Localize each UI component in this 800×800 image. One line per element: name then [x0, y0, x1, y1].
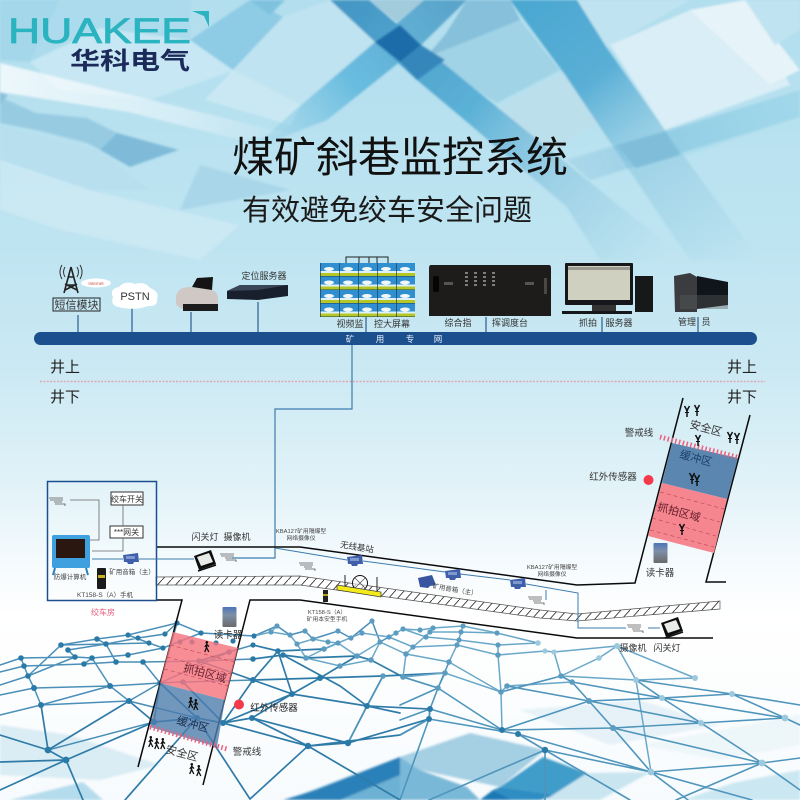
bus: mine private network: 网 — [434, 334, 442, 344]
walkers — [149, 641, 209, 776]
warning line — [660, 437, 737, 457]
zone labels lower: 抓拍区域 — [182, 661, 228, 685]
icon: SMS module tower: 短信模块 — [54, 298, 98, 312]
winch switch: 绞车开关 — [111, 494, 143, 504]
mine speaker — [109, 553, 155, 576]
lower camera and lamp: 摄像机 — [619, 642, 647, 653]
band A — [330, 0, 680, 260]
zone labels: 缓冲区 — [678, 447, 714, 469]
winch room camera — [49, 498, 65, 506]
KBA camera label left: KBA127矿用隔爆型 — [276, 527, 326, 535]
KBA camera label right: 网络摄像仪 — [538, 570, 567, 578]
icon: positioning server — [227, 270, 288, 300]
upper right zones — [648, 405, 740, 553]
warning line lower — [150, 727, 227, 749]
handset label: 矿用本安型手机 — [307, 615, 347, 623]
lower left zones — [149, 632, 238, 776]
tunnel walls — [138, 398, 750, 785]
dispatch console: 挥调度台 — [492, 317, 528, 328]
flash lamp and camera: upper left: 闪关灯 — [191, 531, 219, 542]
dispatch console: 综合指 — [444, 317, 472, 328]
base station 3 — [510, 578, 526, 589]
bus: mine private network: 用 — [376, 334, 384, 344]
workers — [680, 405, 740, 535]
gateway — [110, 526, 143, 538]
admin computer: 管理 — [678, 316, 696, 327]
base station 1 — [347, 555, 363, 566]
network link to underground — [232, 345, 352, 558]
handset label — [307, 609, 347, 623]
upper card reader — [646, 543, 675, 579]
dispatch console — [429, 265, 551, 328]
zone labels lower — [164, 661, 228, 764]
KBA camera label right: KBA127矿用隔爆型 — [527, 563, 577, 571]
zone labels lower: 缓冲区 — [175, 713, 211, 735]
icon: SMS module tower: Internet — [88, 281, 104, 286]
lower infrared sensor: 红外传感器 — [250, 702, 298, 714]
KBA camera label right — [527, 563, 577, 578]
speaker in tunnel: 矿用音箱（主） — [432, 581, 478, 598]
mine speaker: 矿用音箱（主） — [109, 567, 155, 576]
band B — [510, 0, 760, 260]
icon: SMS module tower — [53, 265, 111, 312]
admin computer — [674, 273, 728, 327]
lower camera and lamp — [619, 617, 683, 653]
subtitle: 有效避免绞车安全问题 — [242, 194, 532, 227]
explosion-proof computer — [52, 535, 90, 581]
zone labels — [656, 417, 724, 524]
band C — [250, 0, 467, 150]
tunnel camera 2 — [528, 597, 544, 605]
below-ground labels: 井下 — [50, 389, 80, 406]
base station line — [275, 548, 660, 628]
icon: printer — [176, 277, 218, 311]
lower camera and lamp: 闪关灯 — [653, 642, 681, 653]
upper infrared sensor — [589, 471, 654, 485]
buffer zone lower — [150, 683, 225, 747]
above-ground labels — [50, 359, 757, 376]
rail track — [156, 576, 720, 621]
bus: mine private network: 专 — [406, 334, 414, 344]
icon: PSTN cloud — [112, 283, 158, 309]
upper card reader: 读卡器 — [646, 567, 675, 579]
network mesh — [0, 618, 800, 800]
above-ground labels: 井上 — [50, 359, 80, 376]
capture server computer: 抓拍 — [579, 317, 597, 328]
handset: KT158-S（A）手机 — [77, 590, 133, 599]
logo: 华科电气 — [70, 48, 190, 75]
KBA camera label left — [276, 527, 326, 542]
logo: HUAKEE — [8, 12, 191, 51]
handset label: KT158-S（A） — [308, 609, 346, 616]
capture server computer: 服务器 — [605, 317, 633, 328]
zone labels: 抓拍区域 — [656, 500, 702, 524]
winch room panel — [48, 482, 194, 600]
surface divider — [40, 380, 765, 382]
upper infrared sensor: 红外传感器 — [589, 471, 637, 483]
capture zone lower — [160, 632, 238, 700]
gateway: ***网关 — [114, 527, 139, 537]
title: 煤矿斜巷监控系统 — [232, 134, 568, 181]
upper warning line label: 警戒线 — [625, 427, 654, 439]
buffer zone — [662, 443, 738, 499]
zone labels lower: 安全区 — [164, 742, 200, 764]
band F — [567, 90, 800, 180]
lower infrared sensor — [234, 700, 298, 714]
winch room label: 绞车房 — [91, 607, 115, 617]
capture server computer — [562, 263, 653, 328]
flash lamp and camera: upper left: 摄像机 — [223, 531, 251, 542]
winch switch — [111, 492, 143, 505]
explosion-proof computer: 防爆计算机 — [54, 572, 87, 581]
above-ground labels: 井上 — [727, 359, 757, 376]
tunnel camera 1 — [299, 563, 315, 571]
lower card reader — [214, 607, 243, 641]
wireless base station label: 无线基站 — [339, 539, 375, 555]
video wall — [320, 257, 415, 329]
icon: PSTN cloud: PSTN — [120, 291, 150, 303]
zone labels: 安全区 — [688, 417, 724, 439]
lower warning line label: 警戒线 — [233, 746, 262, 758]
lower card reader: 读卡器 — [214, 629, 243, 641]
video wall: 控大屏幕 — [374, 318, 410, 329]
tunnel handset — [323, 590, 328, 602]
video wall: 视频监 — [336, 318, 364, 329]
base station 2 — [445, 569, 461, 580]
below-ground labels: 井下 — [727, 389, 757, 406]
bus: mine private network: 矿 — [346, 334, 355, 344]
speaker in tunnel — [418, 575, 478, 598]
connector stubs above bus — [78, 302, 698, 333]
KBA camera label left: 网络摄像仪 — [286, 534, 316, 542]
admin computer: 员 — [701, 317, 711, 327]
winch cart — [337, 575, 381, 597]
logo — [8, 11, 209, 75]
icon: positioning server: 定位服务器 — [241, 270, 287, 281]
handset — [77, 568, 133, 599]
below-ground labels — [50, 389, 757, 406]
flash lamp and camera: upper left — [191, 531, 251, 571]
capture zone — [648, 483, 727, 553]
bus: mine private network — [34, 332, 757, 345]
